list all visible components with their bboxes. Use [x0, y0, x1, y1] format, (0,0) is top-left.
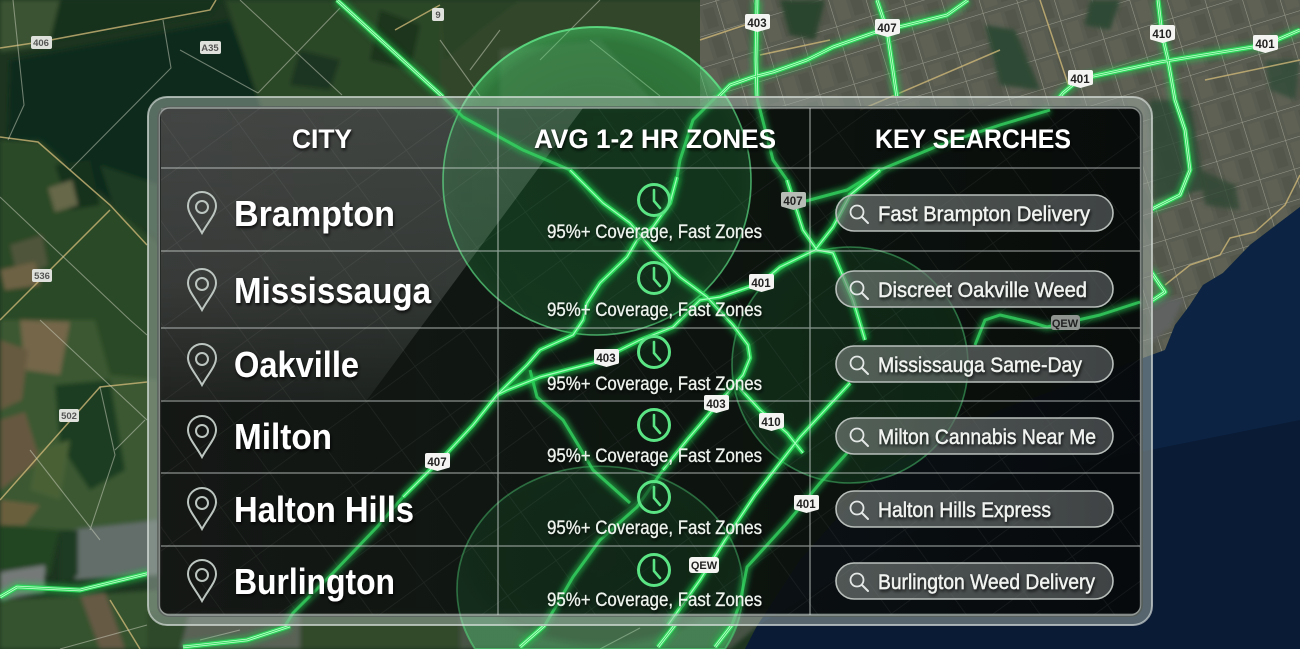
clock and coverage: Milton: 95%+ Coverage, Fast Zones	[547, 446, 762, 467]
row: Oakville: Oakville	[234, 344, 359, 385]
clock and coverage: Oakville: 95%+ Coverage, Fast Zones	[547, 374, 762, 395]
pill: Mississauga Same-Day	[836, 346, 1113, 382]
coverage zone circles	[443, 27, 968, 649]
row: Burlington: Burlington	[234, 561, 395, 602]
pill: Burlington Weed Delivery: Burlington Weed Delivery	[878, 571, 1095, 594]
pill: Fast Brampton Delivery: Fast Brampton Delivery	[878, 203, 1090, 226]
highway shields: 401	[751, 278, 771, 290]
highway shields: 401	[796, 499, 816, 511]
pill: Fast Brampton Delivery	[836, 195, 1113, 231]
highway shields: 410	[761, 417, 781, 429]
highway shields: 410	[1152, 29, 1172, 41]
clock and coverage: Mississauga: 95%+ Coverage, Fast Zones	[547, 300, 762, 321]
column: coverage with clock icons	[547, 184, 762, 611]
highway shields: QEW	[1052, 318, 1079, 330]
highway shields: 401	[1070, 74, 1090, 86]
pill: Discreet Oakville Weed	[836, 271, 1113, 307]
column: city names with pin icons	[188, 192, 432, 602]
table header row: KEY SEARCHES	[875, 124, 1071, 154]
pill: Milton Cannabis Near Me: Milton Cannabis Near Me	[878, 426, 1096, 449]
pill: Mississauga Same-Day: Mississauga Same-Day	[878, 354, 1082, 377]
highway shields: 9	[435, 10, 441, 21]
land: farmland and forest west	[0, 0, 775, 649]
highway shields: 407	[783, 196, 803, 208]
clock and coverage: Brampton	[547, 184, 762, 243]
clock and coverage: Milton	[547, 410, 762, 467]
clock and coverage: Mississauga	[547, 262, 762, 321]
highway shields: QEW	[691, 560, 718, 572]
highway shields: 407	[427, 457, 447, 469]
row: Oakville	[188, 344, 359, 385]
pill: Burlington Weed Delivery	[836, 563, 1113, 599]
table header row	[292, 124, 1071, 154]
pill: Milton Cannabis Near Me	[836, 418, 1113, 454]
column: key search pills	[836, 195, 1113, 599]
clock and coverage: Oakville	[547, 336, 762, 395]
row: Brampton: Brampton	[234, 193, 395, 234]
highway shields: 403	[706, 399, 726, 411]
panel: glass table background	[157, 98, 1143, 624]
pill: Halton Hills Express: Halton Hills Express	[878, 499, 1051, 522]
row: Burlington	[188, 560, 395, 602]
table header row: CITY	[292, 124, 352, 154]
clock and coverage: Halton Hills	[547, 482, 762, 539]
pill: Discreet Oakville Weed: Discreet Oakville Weed	[878, 279, 1087, 302]
highway shields: 536	[34, 271, 50, 282]
zone tint inside panel	[442, 96, 969, 626]
row: Milton	[188, 416, 332, 457]
highway shields: 401	[1255, 39, 1275, 51]
clock and coverage: Burlington	[547, 554, 762, 611]
table header row: AVG 1-2 HR ZONES	[534, 124, 776, 154]
table grid lines	[161, 108, 1140, 615]
pill: Halton Hills Express	[836, 491, 1113, 527]
highway shields: 502	[61, 411, 77, 422]
row: Halton Hills: Halton Hills	[234, 489, 414, 530]
clock and coverage: Burlington: 95%+ Coverage, Fast Zones	[547, 590, 762, 611]
land: city east	[700, 0, 1300, 375]
highway shields: 403	[747, 18, 767, 30]
clock and coverage: Brampton: 95%+ Coverage, Fast Zones	[547, 222, 762, 243]
row: Milton: Milton	[234, 416, 332, 457]
highway shields: 403	[596, 353, 616, 365]
highway shields: 406	[33, 38, 49, 49]
row: Mississauga: Mississauga	[234, 270, 432, 311]
highway shields: A35	[201, 43, 219, 54]
highway shields: 407	[877, 23, 897, 35]
clock and coverage: Halton Hills: 95%+ Coverage, Fast Zones	[547, 518, 762, 539]
highways inside panel	[285, 96, 1140, 626]
panel frame	[148, 97, 1152, 625]
water: Lake Ontario	[745, 207, 1300, 649]
